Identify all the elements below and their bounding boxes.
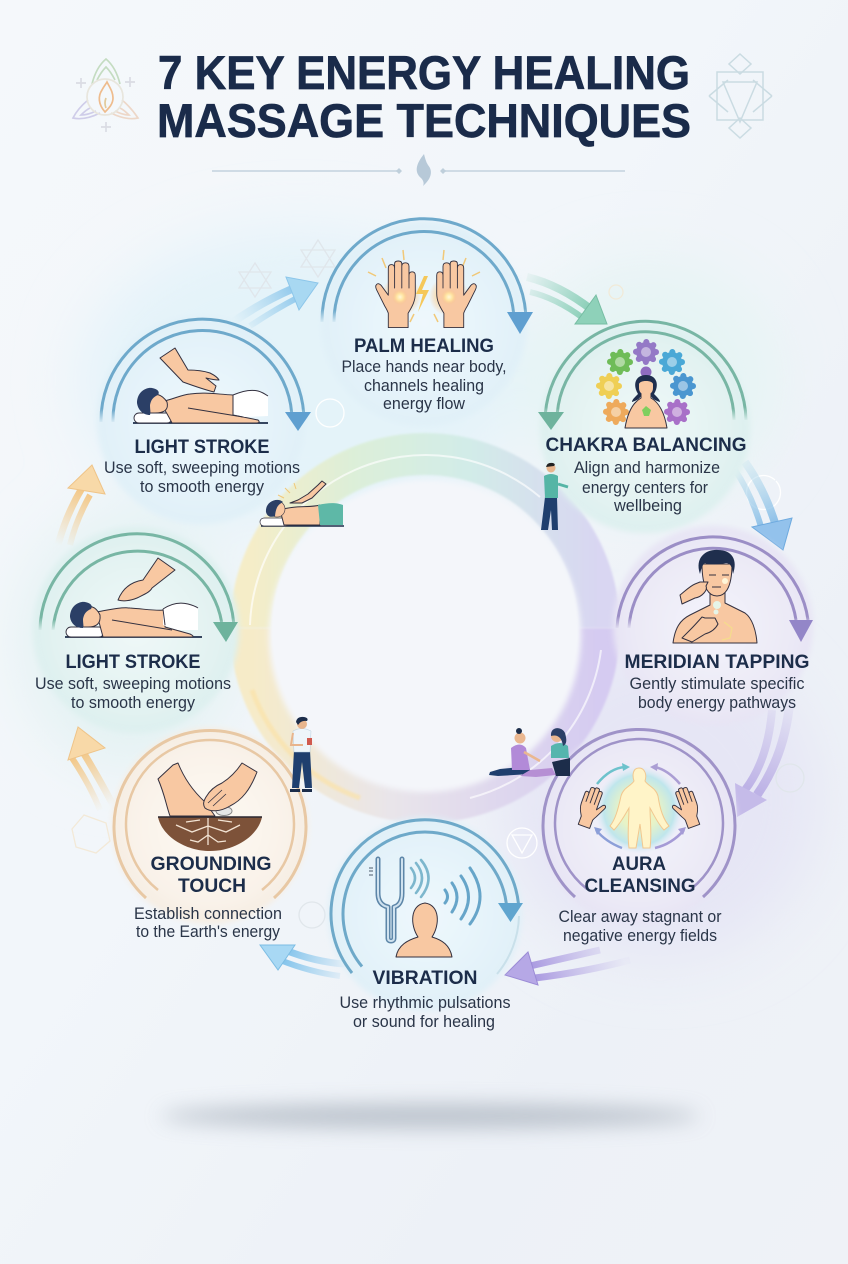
arc arrow: palm healing (322, 219, 533, 334)
heading: chakra balancing: CHAKRA BALANCING (546, 435, 746, 456)
flow arrow: aura cleansing to vibration (505, 950, 630, 985)
flow arrow: meridian tapping to aura cleansing (735, 700, 790, 817)
icon: tapping face and chest (673, 550, 757, 643)
decorative chakra outlines (72, 240, 804, 928)
panel: meridian tapping (613, 526, 813, 726)
text: palm healing description: Place hands near body, (342, 358, 506, 376)
heading: grounding touch: TOUCH (178, 876, 246, 897)
ring: aura cleansing (543, 729, 735, 897)
text: light stroke upper description: Use soft, sweeping motions (104, 459, 300, 477)
icon: hand on foot with roots (158, 763, 262, 851)
icon: geometric chakra emblem (709, 54, 772, 138)
text: grounding touch description: to the Earth's energy (136, 923, 281, 941)
text: aura cleansing description (558, 908, 722, 945)
text: aura cleansing description: negative energy fields (563, 927, 717, 945)
heading: vibration: VIBRATION (372, 968, 478, 989)
text: chakra balancing description: wellbeing (613, 497, 682, 515)
text: vibration description (340, 994, 510, 1031)
text: grounding touch description: Establish connection (134, 905, 282, 923)
panel shadow ellipse (160, 1104, 700, 1128)
panel: chakra balancing (538, 321, 750, 533)
icon: hand above reclining body (133, 348, 268, 423)
text: light stroke lower description (35, 675, 231, 712)
flow arrow: palm healing to chakra balancing (527, 277, 607, 324)
heading: grounding touch: GROUNDING (150, 854, 272, 875)
text: palm healing description (342, 358, 506, 413)
text: aura cleansing description: Clear away stagnant or (558, 908, 722, 926)
figure: standing person with mug (290, 717, 312, 792)
figure: therapist in teal shirt (541, 463, 568, 530)
heading: aura cleansing (584, 854, 696, 897)
text: meridian tapping description (630, 675, 804, 712)
icon: chakra lotuses around figure (599, 342, 693, 428)
panel: light stroke lower (33, 527, 239, 733)
flow arrow: light stroke to light stroke (58, 465, 105, 545)
figure: small massage scene (260, 481, 344, 526)
icon: glowing aura figure with hands (574, 763, 704, 854)
title: MASSAGE TECHNIQUES (157, 94, 691, 147)
arc arrow: light stroke lower (40, 534, 238, 642)
text: palm healing description: channels healing (364, 377, 484, 395)
arc arrow: meridian tapping (617, 537, 813, 642)
text: meridian tapping description: Gently stimulate specific (630, 675, 804, 693)
heading: light stroke lower: LIGHT STROKE (66, 652, 200, 673)
panel: palm healing (321, 219, 533, 426)
icon: hand above reclining body (65, 558, 202, 637)
icon: tuning fork and person (369, 859, 480, 957)
flow arrow: vibration to grounding touch (260, 945, 345, 976)
text: light stroke lower description: to smooth energy (71, 694, 196, 712)
background glow (20, 230, 820, 960)
text: light stroke upper description (104, 459, 300, 496)
figure: two seated people (489, 728, 570, 777)
flow arrow: light stroke to palm healing (233, 277, 318, 326)
panel: aura cleansing (541, 728, 737, 945)
icon: glowing hands (368, 250, 480, 328)
text: palm healing description: energy flow (383, 395, 465, 413)
panel: grounding touch (112, 728, 308, 941)
text: meridian tapping description: body energy pathways (638, 694, 796, 712)
arc arrow: chakra balancing (538, 321, 746, 430)
panel: vibration (328, 817, 523, 1031)
ring: grounding touch (114, 730, 306, 898)
heading: meridian tapping: MERIDIAN TAPPING (624, 652, 810, 673)
title: 7 KEY ENERGY HEALING (158, 46, 690, 99)
central energy ring (250, 454, 601, 802)
icon: triquetra flame emblem (73, 59, 138, 132)
text: vibration description: or sound for healing (353, 1013, 495, 1031)
text: grounding touch description (134, 905, 282, 941)
heading: palm healing: PALM HEALING (354, 336, 494, 357)
heading: grounding touch (150, 854, 272, 897)
text: chakra balancing description: Align and harmonize (574, 459, 720, 477)
arc arrow: light stroke upper (101, 319, 311, 431)
panel: light stroke upper (97, 316, 311, 524)
flow arrow: grounding touch to light stroke (68, 727, 113, 810)
text: light stroke upper description: to smooth energy (140, 478, 265, 496)
title (157, 46, 691, 147)
heading: light stroke upper: LIGHT STROKE (134, 437, 270, 458)
heading: aura cleansing: CLEANSING (584, 876, 696, 897)
arc arrow: vibration (331, 820, 523, 974)
text: chakra balancing description: energy centers for (582, 479, 708, 497)
divider with flame (212, 154, 625, 186)
text: light stroke lower description: Use soft, sweeping motions (35, 675, 231, 693)
flow arrow: chakra balancing to meridian tapping (735, 462, 792, 550)
heading: aura cleansing: AURA (612, 854, 666, 875)
text: vibration description: Use rhythmic pulsations (340, 994, 510, 1012)
text: chakra balancing description (574, 459, 720, 515)
